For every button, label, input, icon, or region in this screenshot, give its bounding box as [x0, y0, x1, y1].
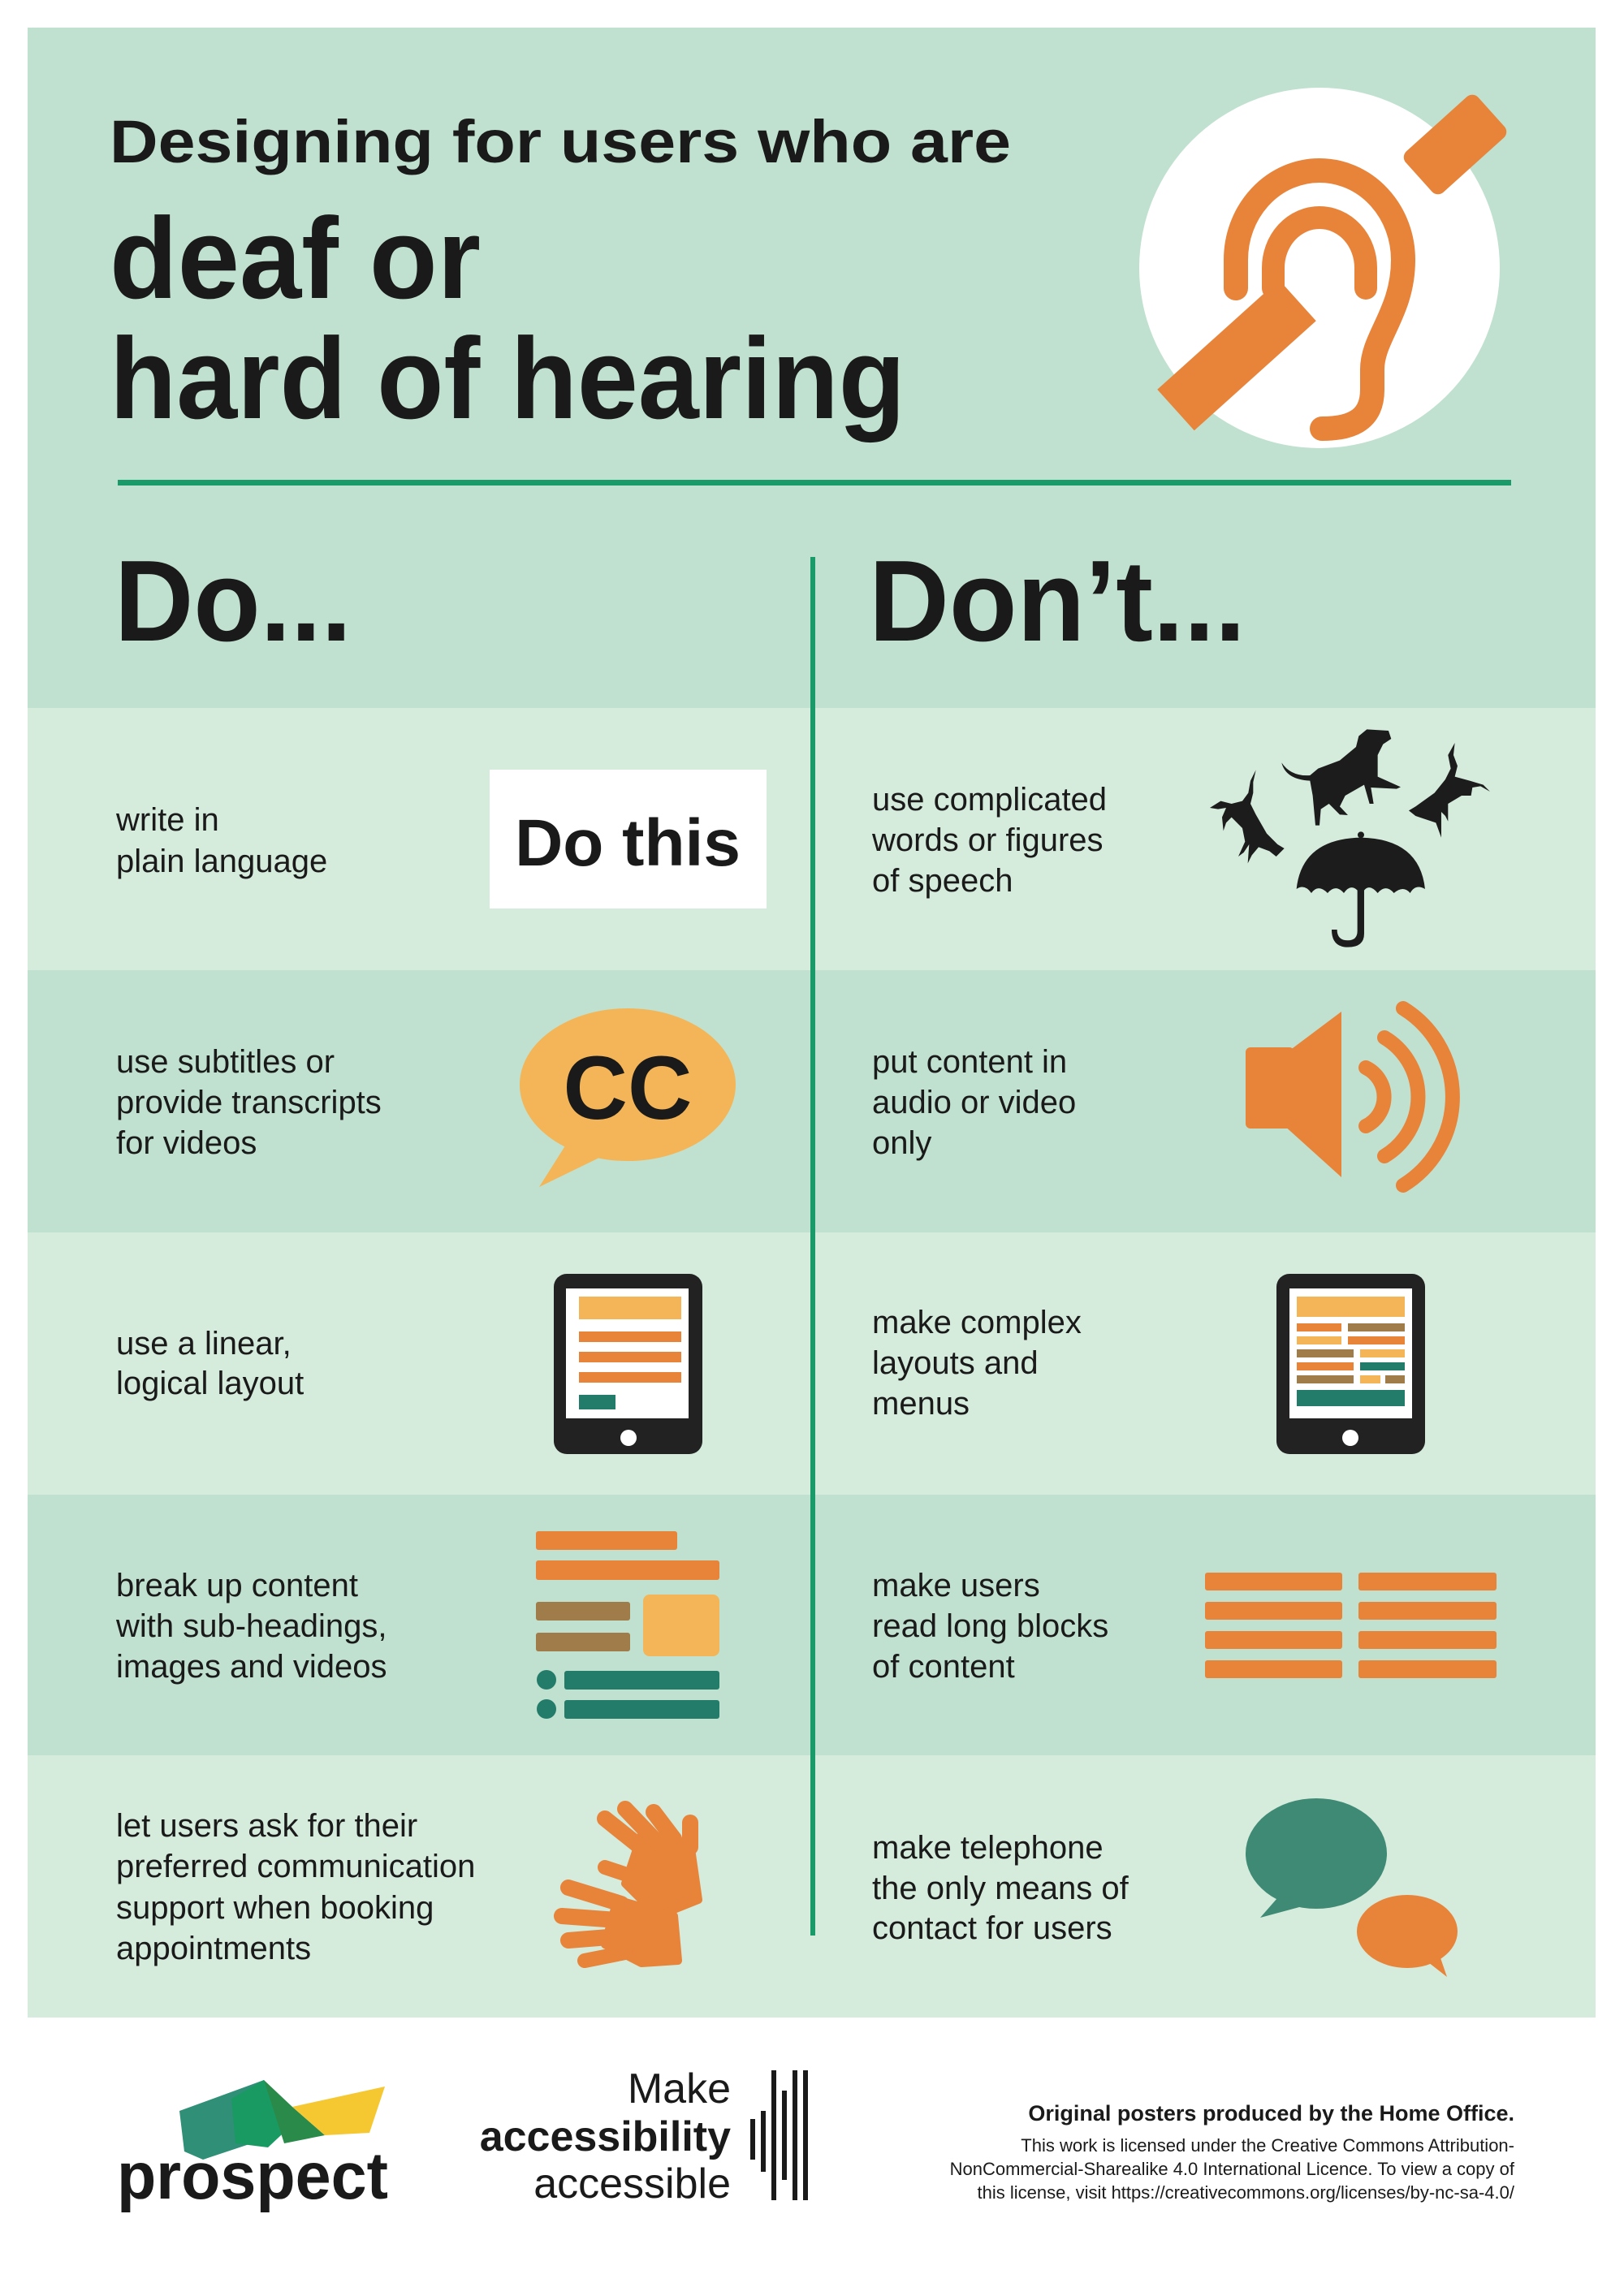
title: deaf or	[110, 194, 481, 323]
row 2 dont text: put content in	[872, 1044, 1067, 1080]
row 4 dont text: of content	[872, 1649, 1015, 1685]
title: Designing for users who are	[110, 108, 1011, 175]
heading: Do: Do...	[114, 537, 352, 666]
row 1 dont text: words or figures	[871, 822, 1104, 858]
icon: speech bubbles	[1246, 1798, 1458, 1977]
logo: prospect	[117, 2080, 388, 2213]
row 4 dont text: make users	[872, 1568, 1040, 1603]
icon: cats dogs umbrella	[1210, 729, 1490, 947]
title: hard of hearing	[110, 314, 905, 443]
logo: make accessibility accessible: accessibility	[480, 2113, 731, 2160]
row 1 do text: plain language	[116, 844, 327, 879]
icon: CC speech bubble	[520, 1008, 736, 1187]
logo: make accessibility accessible: accessible	[533, 2160, 731, 2208]
row 3 do text: logical layout	[116, 1366, 304, 1401]
logo: make accessibility accessible: Make	[628, 2065, 731, 2113]
header panel	[28, 28, 1596, 708]
row 5 dont text: make telephone	[872, 1830, 1104, 1866]
credits: NonCommercial-Sharealike 4.0 International Licence. To view a copy of	[950, 2159, 1515, 2179]
row 2 do text: for videos	[116, 1125, 257, 1161]
row 4 dont text: read long blocks	[872, 1608, 1108, 1644]
row 5 do text: preferred communication	[116, 1849, 475, 1884]
logo: make accessibility accessible	[480, 2065, 808, 2208]
row 2 dont text: audio or video	[872, 1085, 1076, 1120]
icon: speaker	[1246, 1008, 1453, 1185]
credits: This work is licensed under the Creative Commons Attribution-	[1021, 2135, 1514, 2156]
icon: hearing loss ear	[1139, 88, 1510, 448]
icon: Do this box	[490, 770, 767, 908]
row 5 do text: let users ask for their	[116, 1808, 417, 1844]
row 3 dont text: menus	[872, 1386, 970, 1422]
row 4 do text: break up content	[116, 1568, 358, 1603]
row 2 do text: provide transcripts	[116, 1085, 382, 1120]
credits	[950, 2101, 1515, 2203]
logo: prospect: prospect	[117, 2139, 388, 2213]
icon: signing hands	[562, 1809, 698, 1963]
row 1 dont text: of speech	[872, 863, 1013, 899]
row 2 do text: use subtitles or	[116, 1044, 335, 1080]
row 5 dont text: contact for users	[872, 1910, 1112, 1946]
heading: Don't: Don’t...	[869, 537, 1246, 666]
credits: this license, visit https://creativecommons.org/licenses/by-nc-sa-4.0/	[978, 2182, 1515, 2203]
row 4 do text: images and videos	[116, 1649, 387, 1685]
rows backgrounds	[28, 708, 1596, 2018]
title	[110, 108, 1011, 443]
icon: long text blocks	[1205, 1573, 1497, 1678]
row 3 do text: use a linear,	[116, 1326, 292, 1362]
row 5 do text: appointments	[116, 1931, 311, 1966]
row 1 do text: write in	[115, 802, 219, 838]
credits: Original posters produced by the Home Office.	[1028, 2101, 1514, 2126]
row 5 do text: support when booking	[116, 1890, 434, 1926]
row 3 dont text: layouts and	[872, 1345, 1039, 1381]
icon: simple tablet	[554, 1274, 702, 1454]
row 3 dont text: make complex	[872, 1305, 1082, 1340]
row 1 dont text: use complicated	[872, 782, 1107, 818]
icon: complex tablet	[1276, 1274, 1425, 1454]
row 2 dont text: only	[872, 1125, 931, 1161]
row 5 dont text: the only means of	[872, 1871, 1129, 1906]
icon: CC speech bubble: CC	[564, 1038, 692, 1138]
row 4 do text: with sub-headings,	[115, 1608, 387, 1644]
icon: broken up content blocks	[536, 1531, 719, 1719]
icon: Do this box: Do this	[515, 806, 741, 880]
